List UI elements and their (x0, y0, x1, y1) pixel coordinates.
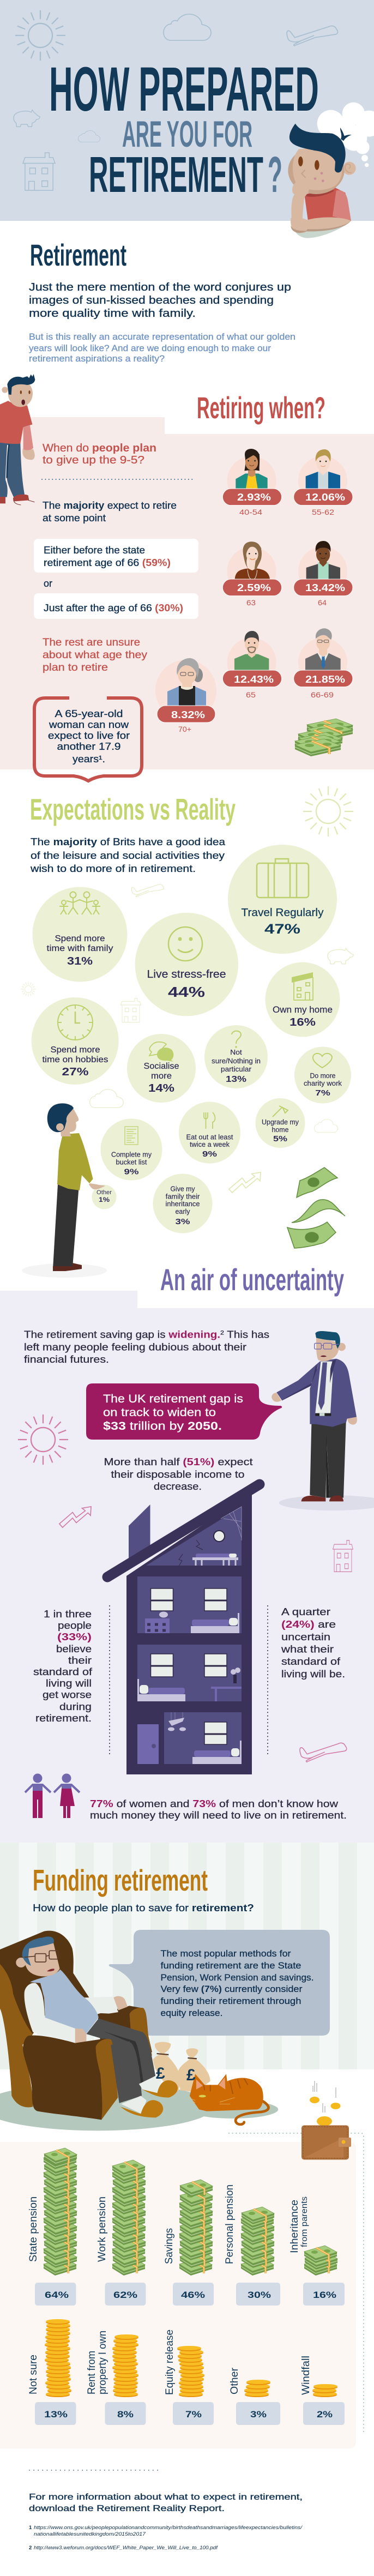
bar: windfall 2% (300, 2356, 345, 2425)
illustration: falling banknotes (287, 1167, 345, 1248)
callout: life expectancy (34, 698, 142, 781)
person stat: 64: 64 (318, 598, 327, 607)
bubble: give my family their inheritance early 3% (153, 1173, 213, 1233)
man (86, 2019, 155, 2103)
bar: other 3%: Other (229, 2367, 240, 2394)
bar: equity release 7% (164, 2330, 214, 2425)
text: a quarter 24%: A quarter (281, 1606, 330, 1617)
bar: rent from property I own 8%: Rent from (86, 2351, 98, 2394)
intro text: The retirement saving gap is widening. (24, 1328, 215, 1340)
text: 1 in three people 33%: standard of (33, 1666, 93, 1677)
bar: personal pension 30% (224, 2184, 280, 2306)
speech bubble: most popular methods: Very few (7%) currently consider (160, 1984, 303, 1994)
illustration: man asleep in armchair with money bags and cat (0, 1931, 278, 2130)
references: 2 (29, 2545, 32, 2551)
bubble: not sure/nothing in particular 13%: particular (221, 1065, 252, 1073)
chair (0, 1931, 89, 2041)
person stat: 40-54: 40-54 (239, 508, 262, 516)
icon: sun (15, 10, 65, 61)
person stat: 55-62 (294, 449, 353, 516)
bar: savings 46%: 46% (181, 2290, 205, 2300)
references: https://www.ons.gov.uk/peoplepopulationandcommunity/birthsdeathsandmarriages/lifeexpectancies/bulletins/ (34, 2525, 303, 2531)
door (137, 1724, 159, 1764)
bubble: travel regularly 47% (228, 845, 337, 954)
question: when do people plan: When do people plan (43, 442, 156, 454)
text: 1 in three people 33%: (33%) (57, 1632, 92, 1642)
title (49, 55, 319, 203)
bubble: give my family their inheritance early 3%: Give my (170, 1185, 195, 1193)
intro text (24, 1328, 269, 1365)
icon: wallet with falling coins (301, 2081, 351, 2159)
icon: pink sun (18, 1415, 68, 1465)
bar: windfall 2%: Windfall (300, 2356, 312, 2395)
call to action (29, 2493, 303, 2513)
hanging plane mobile (168, 1712, 186, 1731)
intro text: left many people feeling dubious about their (24, 1341, 246, 1352)
bar: personal pension 30%: Personal pension (224, 2184, 236, 2264)
bubble: eat out at least twice a week 9%: twice a week (190, 1141, 230, 1148)
references: 1 (29, 2525, 32, 2531)
person stat: 55-62: 55-62 (312, 508, 334, 516)
speech bubble: most popular methods: funding their retirement through (160, 1996, 301, 2006)
text: more than half 51%: More than half (51%) expect (104, 1456, 253, 1467)
bubble: spend more time on hobbies 27%: 27% (62, 1066, 89, 1078)
bar: inheritance from parents 16%: from parents (300, 2196, 309, 2247)
text: majority expect to retire (43, 500, 177, 523)
text: 77% of women and 73% of men: much money they will need to live on in retirement. (90, 1809, 347, 1821)
text: a quarter 24%: what their (281, 1644, 334, 1654)
beds (137, 1613, 242, 1764)
bar: inheritance from parents 16%: Inheritance (289, 2200, 300, 2253)
person stat: 65: 65 (246, 690, 256, 699)
bar: windfall 2%: 2% (317, 2409, 333, 2419)
intro text: of the leisure and social activities they (31, 850, 225, 861)
bubble: do more charity work 7%: 7% (315, 1088, 330, 1098)
person stat: 65 (222, 631, 282, 699)
card: after age 30% (34, 593, 198, 619)
bar: not sure 13%: Not sure (28, 2355, 39, 2394)
text: a quarter 24%: uncertain (281, 1631, 330, 1642)
bar: state pension 64%: 64% (45, 2290, 69, 2300)
card: before state age 59%: retirement age of 66 (59%) (44, 557, 171, 568)
panel: funding methods chart (0, 2081, 364, 2448)
text: 1 in three people 33%: 1 in three (44, 1609, 92, 1620)
attic bed (192, 1554, 238, 1566)
bubble: not sure/nothing in particular 13%: Not (230, 1048, 242, 1056)
panel: retiring when (0, 374, 374, 781)
callout: life expectancy: woman can now (49, 719, 129, 730)
speech bubble: $33 trillion gap (86, 1383, 282, 1440)
bar: state pension 64% (28, 2148, 77, 2306)
person stat: 66-69: 66-69 (311, 690, 334, 699)
text: the rest are unsure: about what age they (43, 649, 148, 661)
text: majority expect to retire: at some point (43, 513, 106, 523)
bubble: spend more time on hobbies 27% (32, 997, 119, 1085)
bubble: give my family their inheritance early 3%: inheritance (166, 1200, 200, 1208)
text: 1 in three people 33%: during (59, 1701, 92, 1712)
bar: work pension 62%: Work pension (96, 2196, 108, 2262)
heading: Funding retirement: Funding retirement (33, 1863, 208, 1897)
speech bubble: $33 trillion gap: $33 trillion by 2050. (103, 1420, 222, 1433)
bar: rent from property I own 8% (86, 2331, 146, 2425)
icon: house (23, 153, 55, 190)
bubble: live stress-free 44%: 44% (168, 984, 205, 1000)
intro text: Just the mere mention of the word conjures up (29, 281, 291, 293)
text: a quarter 24%: (24%) are (281, 1618, 336, 1630)
bubble: upgrade my home 5%: 5% (273, 1134, 287, 1143)
question text: years will look like? And are we doing enough to make our (29, 344, 272, 353)
text: a quarter 24%: standard of (281, 1656, 341, 1667)
text: pound signs on bags (156, 2065, 196, 2084)
leg and slippers (111, 2041, 142, 2103)
bubble: own my home 16% (265, 962, 340, 1037)
bubble: own my home 16%: Own my home (273, 1005, 333, 1015)
bubble: eat out at least twice a week 9%: 9% (202, 1149, 217, 1159)
bubble: spend more time with family 31%: time with family (47, 944, 113, 953)
decorative icons (21, 884, 353, 1193)
question: when do people plan: to give up the 9-5? (43, 454, 144, 466)
bar: savings 46% (164, 2180, 214, 2306)
bubble: upgrade my home 5%: Upgrade my (262, 1118, 299, 1126)
bubble: not sure/nothing in particular 13%: 13% (226, 1075, 246, 1084)
heading: Retirement: Retirement (30, 238, 126, 272)
bar: savings 46%: Savings (164, 2228, 175, 2264)
heading: Expectations vs Reality: Expectations vs Reality (30, 792, 236, 826)
section: funding retirement (0, 1843, 374, 2130)
intro text: financial futures. (24, 1353, 109, 1365)
text: the rest are unsure (43, 637, 148, 673)
bubble: upgrade my home 5% (255, 1098, 305, 1148)
bar: equity release 7%: 7% (185, 2409, 202, 2419)
call to action: For more information about what to expect in retirement, (29, 2493, 303, 2502)
bubble: other 1% (92, 1184, 117, 1209)
text: 1 in three people 33%: living will (46, 1678, 92, 1689)
bubble: not sure/nothing in particular 13% (204, 1025, 268, 1088)
person stat: 40-54 (222, 449, 282, 516)
bubble: other 1%: Other (96, 1189, 112, 1196)
person stat: 55-62: 12.06% (305, 492, 345, 503)
person stat: 65: 12.43% (234, 674, 274, 685)
person stat: 40-54: 2.93% (237, 492, 271, 503)
bar: inheritance from parents 16% (289, 2196, 345, 2306)
card: before state age 59%: Either before the state (44, 545, 145, 556)
bar: rent from property I own 8%: 8% (117, 2409, 134, 2419)
intro text: This has (224, 1328, 269, 1340)
intro text (29, 281, 291, 320)
speech bubble: most popular methods (109, 1930, 330, 2036)
title: ARE YOU FOR (122, 113, 252, 155)
bar: inheritance from parents 16%: 16% (313, 2290, 336, 2300)
bubble: upgrade my home 5%: home (272, 1126, 289, 1134)
icon: pink plane (300, 1743, 347, 1762)
question text (29, 332, 295, 364)
text: pound signs on bags: £ (156, 2065, 165, 2083)
icon: piggy bank (14, 110, 40, 127)
intro text (30, 836, 226, 874)
bubble: spend more time on hobbies 27%: time on hobbies (43, 1055, 108, 1064)
bubble: spend more time with family 31% (33, 887, 128, 982)
text: 77% of women and 73% of men: 77% of women and 73% of men don’t know how (90, 1798, 339, 1809)
text: majority expect to retire: The majority expect to retire (43, 500, 177, 511)
bubble: eat out at least twice a week 9%: Eat out at least (186, 1133, 233, 1141)
text: more than half 51%: their disposable income to (111, 1468, 244, 1480)
speech bubble: $33 trillion gap: The UK retirement gap is (103, 1393, 243, 1405)
intro text: wish to do more of in retirement. (30, 863, 196, 874)
call to action: download the Retirement Reality Report. (29, 2504, 225, 2513)
bubble: travel regularly 47%: Travel Regularly (241, 907, 324, 919)
illustration: run-down house cross-section (107, 1484, 260, 1774)
bubble: own my home 16%: 16% (289, 1016, 316, 1028)
footer (29, 2470, 303, 2551)
section: retirement intro (29, 238, 295, 364)
text: the rest are unsure: The rest are unsure (43, 637, 140, 648)
person stat: 70+: 8.32% (171, 709, 205, 720)
bar: rent from property I own 8%: property I own (97, 2331, 108, 2394)
question: when do people plan (43, 442, 156, 466)
speech bubble: most popular methods: Pension, Work Pension and savings. (160, 1972, 314, 1983)
title: ? (268, 146, 282, 203)
subheading: How do people plan to save for retirement? (33, 1902, 254, 1913)
person stat: 70+: 70+ (178, 725, 191, 733)
references (29, 2525, 303, 2551)
callout: life expectancy: A 65-year-old (55, 708, 123, 719)
bubble: spend more time with family 31%: 31% (67, 955, 93, 967)
person stat: 63: 2.59% (237, 582, 271, 593)
speech bubble: $33 trillion gap: on track to widen to (103, 1406, 216, 1419)
intro text: The majority of Brits have a good idea (31, 836, 226, 847)
bar: not sure 13% (28, 2319, 76, 2425)
illustration: man in olive sweater (22, 1103, 107, 1278)
bubble: complete my bucket list 9% (100, 1119, 162, 1180)
icon: cloud (164, 14, 211, 40)
card: after age 30%: Just after the age of 66 (30%) (44, 603, 183, 613)
icon: stacks of cash (295, 719, 353, 756)
section: expectations vs reality (21, 786, 353, 1278)
text: 1 in three people 33%: get worse (43, 1689, 92, 1700)
header panel (0, 0, 374, 221)
speech bubble: most popular methods: funding retirement are the State (160, 1960, 301, 1971)
illustration: worried man in suit (272, 1331, 374, 1510)
bar: not sure 13%: 13% (44, 2409, 68, 2419)
bubble: live stress-free 44%: Live stress-free (147, 968, 226, 980)
person stat: 64: 13.42% (305, 582, 345, 593)
text: more than half 51%: decrease. (154, 1480, 202, 1492)
person stat: 63: 63 (246, 598, 256, 607)
person stat: 63 (222, 541, 282, 607)
text: pound signs on bags: £ (186, 2066, 196, 2084)
speech bubble: most popular methods: equity release. (160, 2008, 222, 2018)
illustration: thinking man with thought cloud (288, 103, 374, 238)
bubble: give my family their inheritance early 3%: family their (166, 1193, 200, 1201)
bar: equity release 7%: Equity release (164, 2330, 176, 2395)
cat (236, 2101, 268, 2124)
person stat: 64 (294, 541, 353, 607)
callout: life expectancy: expect to live for (48, 730, 130, 741)
bubble: complete my bucket list 9%: bucket list (116, 1158, 147, 1166)
text: 1 in three people 33%: retirement. (35, 1713, 92, 1724)
chair front (23, 2036, 117, 2120)
icon: green sun (303, 786, 353, 836)
bubble: eat out at least twice a week 9% (179, 1102, 240, 1164)
bubble: do more charity work 7%: Do more (310, 1072, 336, 1080)
callout: life expectancy: years¹. (73, 754, 105, 765)
text: a quarter 24%: living will be. (281, 1668, 345, 1680)
icon: pink house (333, 1540, 353, 1572)
nightstand and pig (145, 1612, 170, 1633)
bubble: do more charity work 7% (294, 1047, 351, 1104)
text: 1 in three people 33%: their (68, 1655, 92, 1666)
text: 1 in three people 33%: people (58, 1620, 92, 1631)
bar: state pension 64%: State pension (28, 2196, 39, 2262)
bubble: spend more time on hobbies 27%: Spend more (50, 1045, 100, 1055)
intro text: more quality time with family. (29, 308, 196, 320)
text: 77% of women and 73% of men (90, 1798, 347, 1821)
illustration: surprised man (0, 374, 35, 505)
bar: work pension 62% (96, 2160, 146, 2306)
bubble: live stress-free 44% (135, 913, 238, 1016)
references: http://www3.weforum.org/docs/WEF_White_Paper_We_Will_Live_to_100.pdf (34, 2545, 218, 2551)
bubble: spend more time with family 31%: Spend more (55, 934, 105, 943)
bubble: socialise more 14%: 14% (148, 1082, 174, 1094)
icon: plane (287, 26, 338, 46)
callout: life expectancy: another 17.9 (57, 741, 121, 752)
bar: other 3% (229, 2367, 280, 2425)
text: 1 in three people 33%: believe (56, 1644, 92, 1654)
text: more than half 51% (104, 1456, 253, 1492)
text: 1 in three people 33% (33, 1609, 93, 1724)
person stat: 70+ (155, 658, 216, 733)
question text: retirement aspirations a reality? (29, 354, 165, 364)
speech bubble: most popular methods: The most popular methods for (160, 1948, 291, 1959)
bubble: do more charity work 7%: charity work (304, 1080, 342, 1087)
bar: other 3%: 3% (250, 2409, 267, 2419)
person stat: 66-69 (294, 628, 353, 699)
icon: small cloud (78, 130, 100, 142)
references: nationallifetablesunitedkingdom/2015to2017 (34, 2531, 146, 2537)
bubble: give my family their inheritance early 3%: early (176, 1208, 190, 1215)
icon: pink arrow (59, 1507, 91, 1527)
text: a quarter 24% (281, 1606, 345, 1680)
bubble: socialise more 14% (127, 1034, 196, 1103)
question text: But is this really an accurate representation of what our golden (29, 332, 295, 342)
bubble: not sure/nothing in particular 13%: sure/Nothing in (212, 1057, 261, 1065)
icon: man and woman figures (25, 1773, 80, 1818)
windows (150, 1588, 227, 1744)
desk and flowers (211, 1668, 242, 1701)
intro text: images of sun-kissed beaches and spending (29, 294, 274, 306)
bubble: complete my bucket list 9%: Complete my (111, 1151, 152, 1158)
text: or: or (44, 578, 52, 589)
bubble: socialise more 14%: more (151, 1072, 172, 1081)
bubble: give my family their inheritance early 3%: 3% (176, 1217, 190, 1226)
bubble: other 1%: 1% (99, 1196, 110, 1203)
person stat: 66-69: 21.85% (305, 674, 345, 685)
bubble: complete my bucket list 9%: 9% (124, 1167, 138, 1177)
card: before state age 59% (34, 539, 198, 573)
bubble: socialise more 14%: Socialise (144, 1062, 179, 1071)
bubble: travel regularly 47%: 47% (264, 922, 300, 937)
bar: work pension 62%: 62% (113, 2290, 137, 2300)
text: the rest are unsure: plan to retire (43, 662, 108, 673)
intro text: 2 (220, 1329, 224, 1336)
panel: an air of uncertainty (0, 1262, 374, 1843)
bar: personal pension 30%: 30% (248, 2290, 271, 2300)
money bags (153, 2042, 210, 2092)
